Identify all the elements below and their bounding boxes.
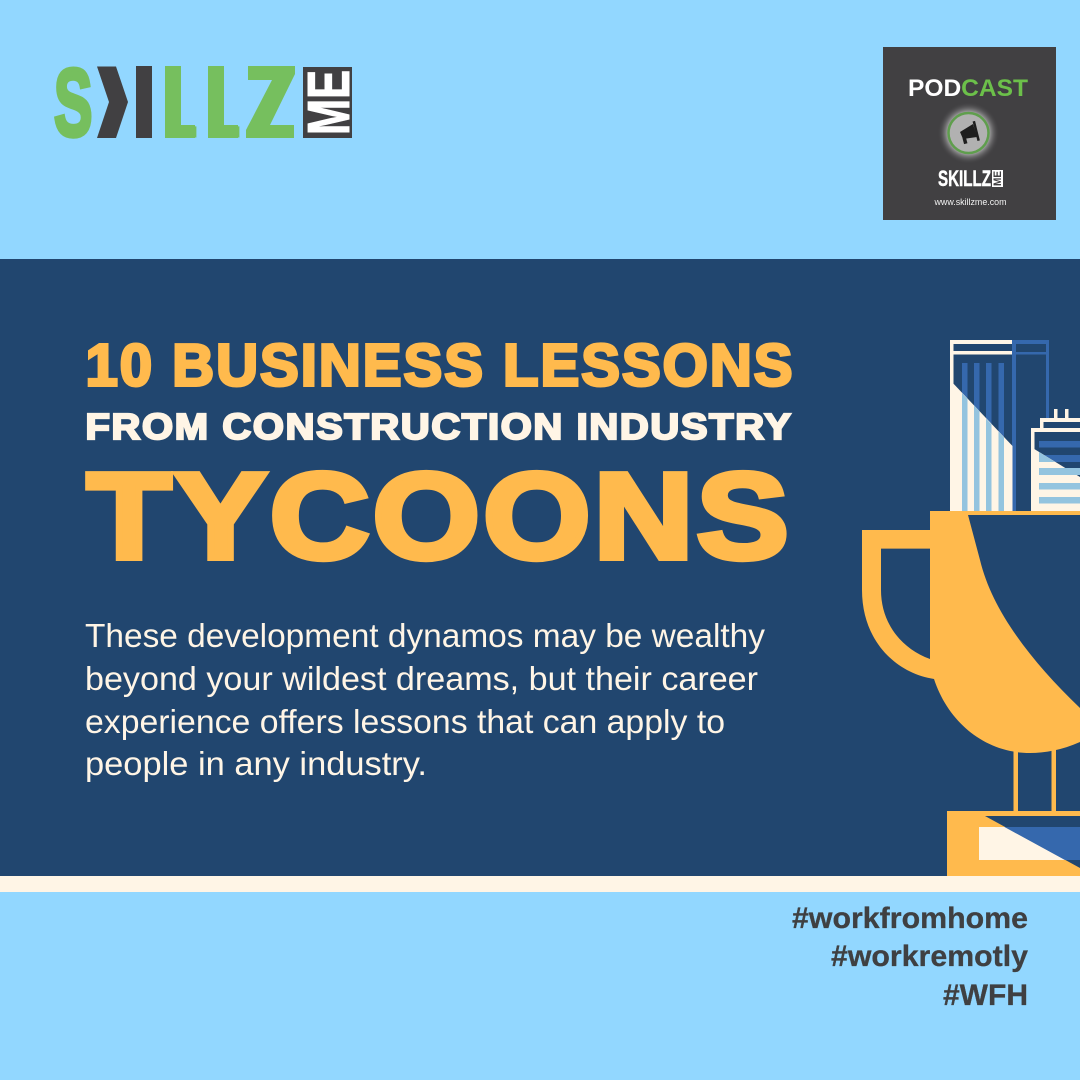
upper window stripes (962, 363, 1004, 437)
logo letter Z: Z (245, 48, 295, 159)
lit facade (1034, 449, 1080, 511)
logo ME box (303, 67, 352, 138)
icon: megaphone (960, 121, 980, 144)
badge heading: PODCAST (908, 75, 1028, 102)
title line 1: 10 BUSINESS LESSONS (86, 332, 794, 398)
logo letter L second: L (204, 47, 241, 159)
lit window stripes (962, 393, 1004, 512)
tall building (950, 340, 1016, 512)
panel: navy hero (0, 259, 1080, 876)
logo letter S: S (54, 48, 92, 156)
hashtags (792, 902, 1028, 1012)
title line 2: FROM CONSTRUCTION INDUSTRY (86, 406, 792, 447)
description line 3: experience offers lessons that can apply to (85, 703, 725, 740)
trophy inner shadow (968, 515, 1080, 708)
badge url: www.skillzme.com (934, 197, 1006, 207)
description line 1: These development dynamos may be wealthy (85, 617, 765, 654)
lit floors (1039, 452, 1080, 504)
trophy stems (1014, 750, 1018, 812)
logo ME text: ME (296, 70, 362, 135)
hashtag 1: #workfromhome (792, 902, 1028, 935)
badge small logo: SKILLZ (938, 166, 991, 191)
title line 3: TYCOONS (87, 448, 792, 584)
lit facade (950, 380, 1012, 512)
trophy base (947, 811, 1080, 876)
tall building back outline (1016, 340, 1049, 418)
hashtag 2: #workremotly (831, 940, 1028, 973)
illustration: trophy with buildings (862, 340, 1080, 876)
logo letter L: L (161, 47, 198, 159)
base plaque cream (979, 827, 1065, 860)
logo letter I (136, 66, 152, 138)
base plaque shadow (985, 816, 1080, 868)
short building (1031, 409, 1080, 512)
hashtag 3: #WFH (943, 979, 1028, 1012)
badge circle (948, 113, 988, 153)
podcast badge (883, 47, 1056, 220)
title (86, 332, 794, 584)
trophy cup (862, 511, 1080, 753)
description line 4: people in any industry. (85, 745, 427, 782)
badge small ME box (992, 170, 1003, 187)
description line 2: beyond your wildest dreams, but their career (85, 660, 758, 697)
badge glow (938, 102, 1000, 164)
badge background (883, 47, 1056, 220)
description text (85, 617, 765, 782)
cream strip (0, 876, 1080, 892)
base plaque blue (1004, 827, 1080, 860)
badge small ME text: ME (992, 171, 1004, 186)
logo: SKILLZ ME (54, 47, 362, 159)
upper floors (1039, 441, 1080, 448)
logo chevron K (97, 66, 128, 138)
